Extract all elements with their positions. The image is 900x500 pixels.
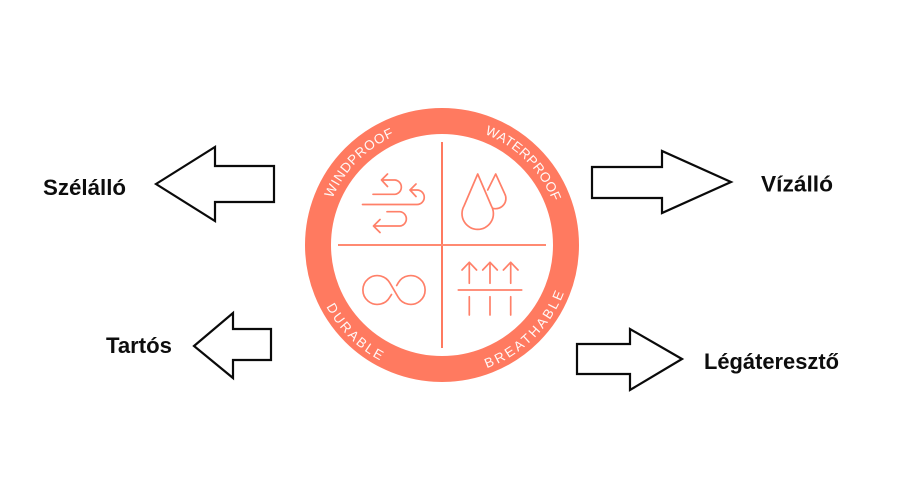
icon: water drops — [462, 174, 506, 229]
label: Tartós: Tartós — [106, 333, 172, 358]
ring label: waterproof: WATERPROOF — [487, 125, 562, 200]
icon: wind — [362, 174, 424, 232]
arrow: toward Tartós — [194, 313, 271, 378]
ring label: windproof: WINDPROOF — [324, 128, 392, 196]
ring label: breathable: BREATHABLE — [484, 290, 564, 368]
arrow: toward Szélálló — [156, 147, 274, 221]
quadrant divider: horizontal — [338, 244, 546, 246]
label: Légáteresztő: Légáteresztő — [704, 349, 839, 374]
ring — [318, 121, 566, 369]
icon: breathable arrows — [458, 262, 522, 315]
label: Szélálló: Szélálló — [43, 175, 126, 200]
icon: infinity — [363, 276, 425, 304]
badge: circular four-property emblem — [305, 108, 579, 382]
ring label: durable: DURABLE — [326, 302, 384, 360]
arrow: toward Vízálló — [592, 151, 731, 213]
arrow: toward Légáteresztő — [577, 329, 682, 390]
label: Vízálló: Vízálló — [761, 172, 833, 196]
quadrant divider: vertical — [441, 142, 443, 348]
